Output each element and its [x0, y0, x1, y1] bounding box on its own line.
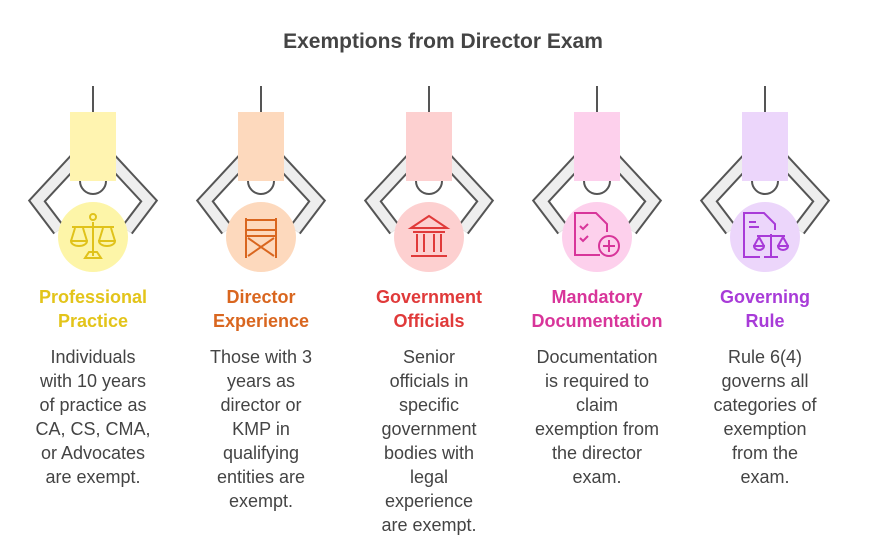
column: Government Officials: are exempt.	[381, 515, 477, 535]
column: Mandatory Documentation: exam.	[572, 467, 622, 487]
column: Governing Rule: exemption	[723, 419, 807, 439]
column: Mandatory Documentation: is required to	[545, 371, 649, 391]
column: Director Experience: Experience	[213, 311, 309, 331]
column: Government Officials: legal	[410, 467, 448, 487]
column: Government Officials: Senior	[403, 347, 455, 367]
column 2 graphic	[205, 86, 317, 272]
column 4 graphic	[541, 86, 653, 272]
column: Professional Practice: Practice	[58, 311, 128, 331]
column: Mandatory Documentation: exemption from	[535, 419, 659, 439]
column: Government Officials: officials in	[390, 371, 468, 391]
column: Director Experience: Those with 3	[210, 347, 312, 367]
column: Governing Rule: from the	[732, 443, 798, 463]
column: Mandatory Documentation: Documentation	[531, 311, 662, 331]
column 1 graphic	[37, 86, 149, 272]
claws and icons	[28, 86, 830, 272]
column: Governing Rule: governs all	[721, 371, 809, 391]
column: Governing Rule: Rule 6(4)	[728, 347, 802, 367]
column: Director Experience: qualifying	[223, 443, 299, 463]
column: Government Officials: Government	[376, 287, 482, 307]
column: Professional Practice: Professional	[39, 287, 147, 307]
column: Director Experience: KMP in	[232, 419, 290, 439]
column: Governing Rule: Rule	[745, 311, 784, 331]
column: Professional Practice: of practice as	[39, 395, 147, 415]
column: Professional Practice: Individuals	[50, 347, 136, 367]
column: Director Experience: Director	[226, 287, 296, 307]
column: Director Experience: director or	[220, 395, 302, 415]
column: Governing Rule: Governing	[720, 287, 810, 307]
column: Mandatory Documentation	[531, 287, 662, 487]
column: Professional Practice	[35, 287, 150, 487]
column: Mandatory Documentation: Documentation	[536, 347, 658, 367]
column: Governing Rule	[713, 287, 817, 487]
column: Mandatory Documentation: the director	[552, 443, 642, 463]
column: Director Experience: exempt.	[229, 491, 293, 511]
column: Director Experience: years as	[227, 371, 295, 391]
column: Government Officials: bodies with	[384, 443, 474, 463]
title: Exemptions from Director Exam	[283, 30, 603, 53]
column: Professional Practice: with 10 years	[40, 371, 146, 391]
column: Governing Rule: categories of	[713, 395, 817, 415]
column: Government Officials: government	[381, 419, 477, 439]
column: Director Experience	[210, 287, 312, 511]
column: Government Officials: Officials	[393, 311, 465, 331]
column: Government Officials: experience	[385, 491, 473, 511]
column: Government Officials	[376, 287, 482, 535]
column: Governing Rule: exam.	[740, 467, 790, 487]
column: Mandatory Documentation: claim	[576, 395, 618, 415]
column: Professional Practice: or Advocates	[41, 443, 145, 463]
column 5 graphic	[709, 86, 821, 272]
column: Mandatory Documentation: Mandatory	[551, 287, 642, 307]
column: Professional Practice: CA, CS, CMA,	[35, 419, 150, 439]
column: Professional Practice: are exempt.	[45, 467, 141, 487]
column 3 graphic	[373, 86, 485, 272]
column: Director Experience: entities are	[217, 467, 305, 487]
column: Government Officials: specific	[399, 395, 459, 415]
